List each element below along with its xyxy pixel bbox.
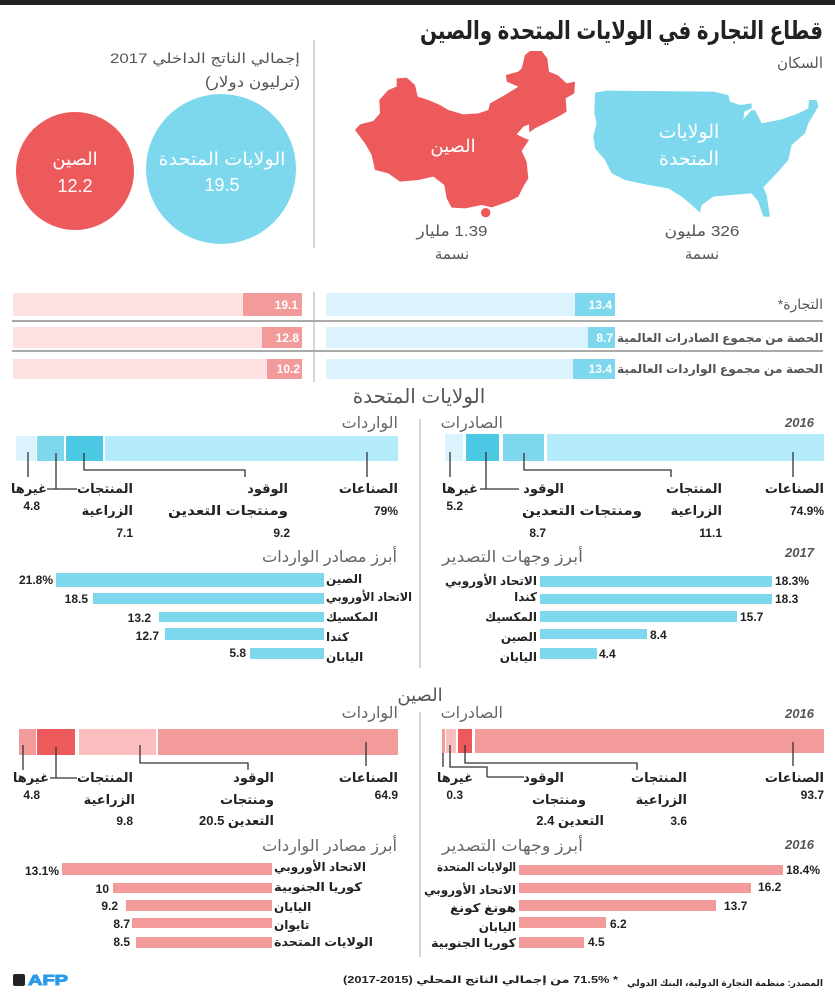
chart: top US export destinations: 4.4: [599, 647, 616, 661]
row: share of world imports: الحصة من مجموع الواردات العالمية: [617, 362, 823, 377]
chart: US imports composition: الصناعات: [339, 481, 398, 496]
chart: US exports composition: 11.1: [699, 526, 722, 540]
population figure: China: [415, 223, 488, 263]
chart: top China export destinations: اليابان: [479, 920, 516, 934]
chart: top China import sources: 10: [96, 882, 109, 896]
heading: top China import sources: أبرز مصادر الواردات: [262, 835, 397, 856]
chart: top US export destinations: [445, 573, 809, 664]
chart: top US export destinations: كندا: [514, 590, 537, 604]
chart: top China export destinations: الاتحاد الأوروبي: [424, 882, 516, 898]
chart: top China import sources: 8.5: [113, 935, 130, 949]
population figure: US: 326 مليون: [664, 223, 740, 240]
circle: US GDP: [146, 94, 296, 244]
heading: GDP: [110, 50, 300, 91]
chart: China imports composition: المنتجات: [77, 770, 133, 785]
map: United States: الولايات: [659, 122, 719, 143]
chart: China exports composition: 0.3: [446, 788, 463, 802]
chart: top China export destinations: 16.2: [758, 880, 782, 894]
label: 2016 China destinations: 2016: [784, 837, 815, 852]
circle: China GDP: 12.2: [57, 176, 93, 196]
chart: US exports composition: الزراعية: [671, 503, 722, 518]
chart: top US import sources: [19, 572, 412, 664]
heading: GDP: (ترليون دولار): [205, 74, 300, 91]
heading: China imports: الواردات: [342, 705, 398, 723]
chart: China imports composition: ومنتجات: [220, 792, 274, 807]
chart: top China export destinations: الولايات المتحدة: [437, 860, 516, 875]
chart: top China export destinations: هونغ كونغ: [450, 901, 516, 916]
chart: top China import sources: كوريا الجنوبية: [274, 880, 362, 895]
chart: US exports composition: غيرها: [442, 481, 478, 496]
chart: US exports composition: الوقود: [523, 481, 564, 496]
chart: top US import sources: 13.2: [128, 611, 151, 625]
circle: China GDP: [16, 112, 134, 230]
panel: population: [355, 51, 823, 263]
chart: top US import sources: المكسيك: [326, 610, 378, 624]
chart: top China import sources: تايوان: [274, 918, 309, 933]
chart: top US export destinations: 15.7: [740, 610, 764, 624]
panel: trade comparison: [12, 292, 823, 382]
population figure: US: نسمة: [685, 246, 719, 263]
label: 2017 US: 2017: [784, 545, 815, 560]
heading: population: السكان: [777, 55, 823, 72]
chart: top US import sources: 21.8%: [19, 573, 53, 587]
chart: US imports composition: 79%: [374, 504, 398, 518]
chart: China imports composition: 9.8: [116, 814, 133, 828]
chart: US imports composition: [11, 436, 398, 540]
chart: top China export destinations: 6.2: [610, 917, 627, 931]
circle: US GDP: 19.5: [204, 175, 240, 195]
chart: China imports composition: 64.9: [375, 788, 398, 802]
chart: top China import sources: الولايات المتحدة: [274, 935, 373, 950]
chart: top China export destinations: 18.4%: [786, 863, 820, 877]
chart: top China import sources: 8.7: [113, 917, 130, 931]
heading: US imports: الواردات: [342, 415, 398, 433]
chart: top China export destinations: 4.5: [588, 935, 605, 949]
chart: US imports composition: الوقود: [247, 481, 288, 496]
chart: top China import sources: 9.2: [101, 899, 118, 913]
chart: top US export destinations: 8.4: [650, 628, 667, 642]
chart: China imports composition: الزراعية: [84, 792, 135, 807]
map: China: الصين: [430, 136, 476, 157]
chart: top China export destinations: كوريا الجنوبية: [431, 936, 516, 951]
chart: top US export destinations: الصين: [501, 630, 537, 644]
heading: top China export destinations: أبرز وجهات التصدير: [441, 835, 583, 856]
chart: top US export destinations: الاتحاد الأوروبي: [445, 573, 537, 589]
footnote: * 71.5% من إجمالي الناتج المحلي (2015-2017): [343, 975, 618, 986]
chart: US exports composition: 5.2: [446, 499, 463, 513]
chart: top US export destinations: المكسيك: [485, 610, 537, 624]
label: 2016 China: 2016: [784, 706, 815, 721]
row: trade share: 13.4: [589, 298, 612, 312]
heading: top US import sources: أبرز مصادر الواردات: [262, 546, 397, 567]
chart: China exports composition: الزراعية: [636, 792, 687, 807]
chart: top US import sources: الصين: [326, 572, 362, 586]
chart: US imports composition: غيرها: [11, 481, 47, 496]
row: share of world exports: 12.8: [276, 331, 299, 345]
chart: top US import sources: 18.5: [65, 592, 88, 606]
chart: top China import sources: 13.1%: [25, 864, 59, 878]
circle: US GDP: الولايات المتحدة: [158, 149, 286, 170]
chart: China exports composition: التعدين 2.4: [536, 813, 604, 828]
heading: China exports: الصادرات: [441, 705, 503, 723]
chart: US exports composition: ومنتجات التعدين: [522, 503, 642, 518]
chart: China exports composition: غيرها: [437, 770, 473, 785]
chart: US exports composition: 74.9%: [790, 504, 824, 518]
row: trade share: 19.1: [275, 298, 298, 312]
row: share of world exports: 8.7: [596, 331, 613, 345]
chart: US exports composition: 8.7: [529, 526, 546, 540]
chart: US imports composition: الزراعية: [82, 503, 133, 518]
map: China: [355, 51, 575, 217]
heading: US exports: الصادرات: [441, 415, 503, 433]
chart: China exports composition: 93.7: [801, 788, 824, 802]
chart: US imports composition: المنتجات: [77, 481, 133, 496]
chart: China exports composition: الوقود: [523, 770, 564, 785]
map: United States: [593, 91, 818, 217]
chart: US exports composition: الصناعات: [765, 481, 824, 496]
chart: China exports composition: المنتجات: [631, 770, 687, 785]
chart: China exports composition: [437, 729, 824, 828]
footer: source: المصدر: منظمة التجارة الدولية، البنك الدولي: [627, 978, 823, 989]
chart: US exports composition: المنتجات: [666, 481, 722, 496]
row: share of world imports: 10.2: [277, 362, 300, 376]
heading: China: الصين: [397, 685, 443, 706]
chart: China exports composition: 3.6: [670, 814, 687, 828]
row: trade share: [13, 293, 823, 316]
chart: US exports composition: [442, 434, 824, 540]
chart: US imports composition: 7.1: [116, 526, 133, 540]
heading: United States: الولايات المتحدة: [353, 386, 485, 408]
row: trade share: التجارة*: [778, 296, 823, 313]
chart: top US export destinations: 18.3: [775, 592, 799, 606]
chart: top US import sources: الاتحاد الأوروبي: [326, 589, 412, 605]
chart: top US import sources: 5.8: [229, 646, 246, 660]
chart: China imports composition: الوقود: [233, 770, 274, 785]
chart: top China export destinations: [424, 860, 820, 951]
chart: US imports composition: 4.8: [23, 499, 40, 513]
chart: China exports composition: الصناعات: [765, 770, 824, 785]
chart: China imports composition: الصناعات: [339, 770, 398, 785]
chart: top US import sources: كندا: [326, 630, 349, 644]
chart: China imports composition: غيرها: [13, 770, 49, 785]
chart: top US import sources: 12.7: [136, 629, 159, 643]
chart: US imports composition: 9.2: [273, 526, 290, 540]
chart: China exports composition: ومنتجات: [532, 792, 586, 807]
chart: top China import sources: الاتحاد الأوروبي: [274, 859, 366, 875]
logo: AFP: AFP: [28, 972, 68, 989]
chart: top US export destinations: 18.3%: [775, 574, 809, 588]
chart: top China import sources: اليابان: [274, 900, 311, 914]
row: share of world imports: [13, 359, 823, 379]
row: share of world exports: [13, 327, 823, 348]
chart: China imports composition: 4.8: [23, 788, 40, 802]
chart: top US import sources: اليابان: [326, 650, 363, 664]
map: United States: المتحدة: [659, 149, 719, 170]
circle: China GDP: الصين: [52, 149, 98, 170]
population figure: US: [664, 223, 740, 263]
population figure: China: 1.39 مليار: [415, 223, 488, 240]
heading: GDP: إجمالي الناتج الداخلي 2017: [110, 50, 300, 67]
chart: top US export destinations: اليابان: [500, 650, 537, 664]
panel: GDP: [16, 50, 300, 244]
chart: China imports composition: التعدين 20.5: [199, 813, 274, 828]
chart: top China import sources: [25, 859, 373, 950]
chart: US imports composition: ومنتجات التعدين: [168, 503, 288, 518]
row: share of world imports: 13.4: [589, 362, 612, 376]
logo: AFP: [13, 972, 68, 989]
chart: China imports composition: [13, 729, 398, 828]
label: 2016 US: 2016: [784, 415, 815, 430]
heading: top US export destinations: أبرز وجهات التصدير: [441, 546, 583, 567]
row: share of world exports: الحصة من مجموع الصادرات العالمية: [617, 331, 823, 346]
chart: top China export destinations: 13.7: [724, 899, 748, 913]
population figure: China: نسمة: [435, 246, 469, 263]
